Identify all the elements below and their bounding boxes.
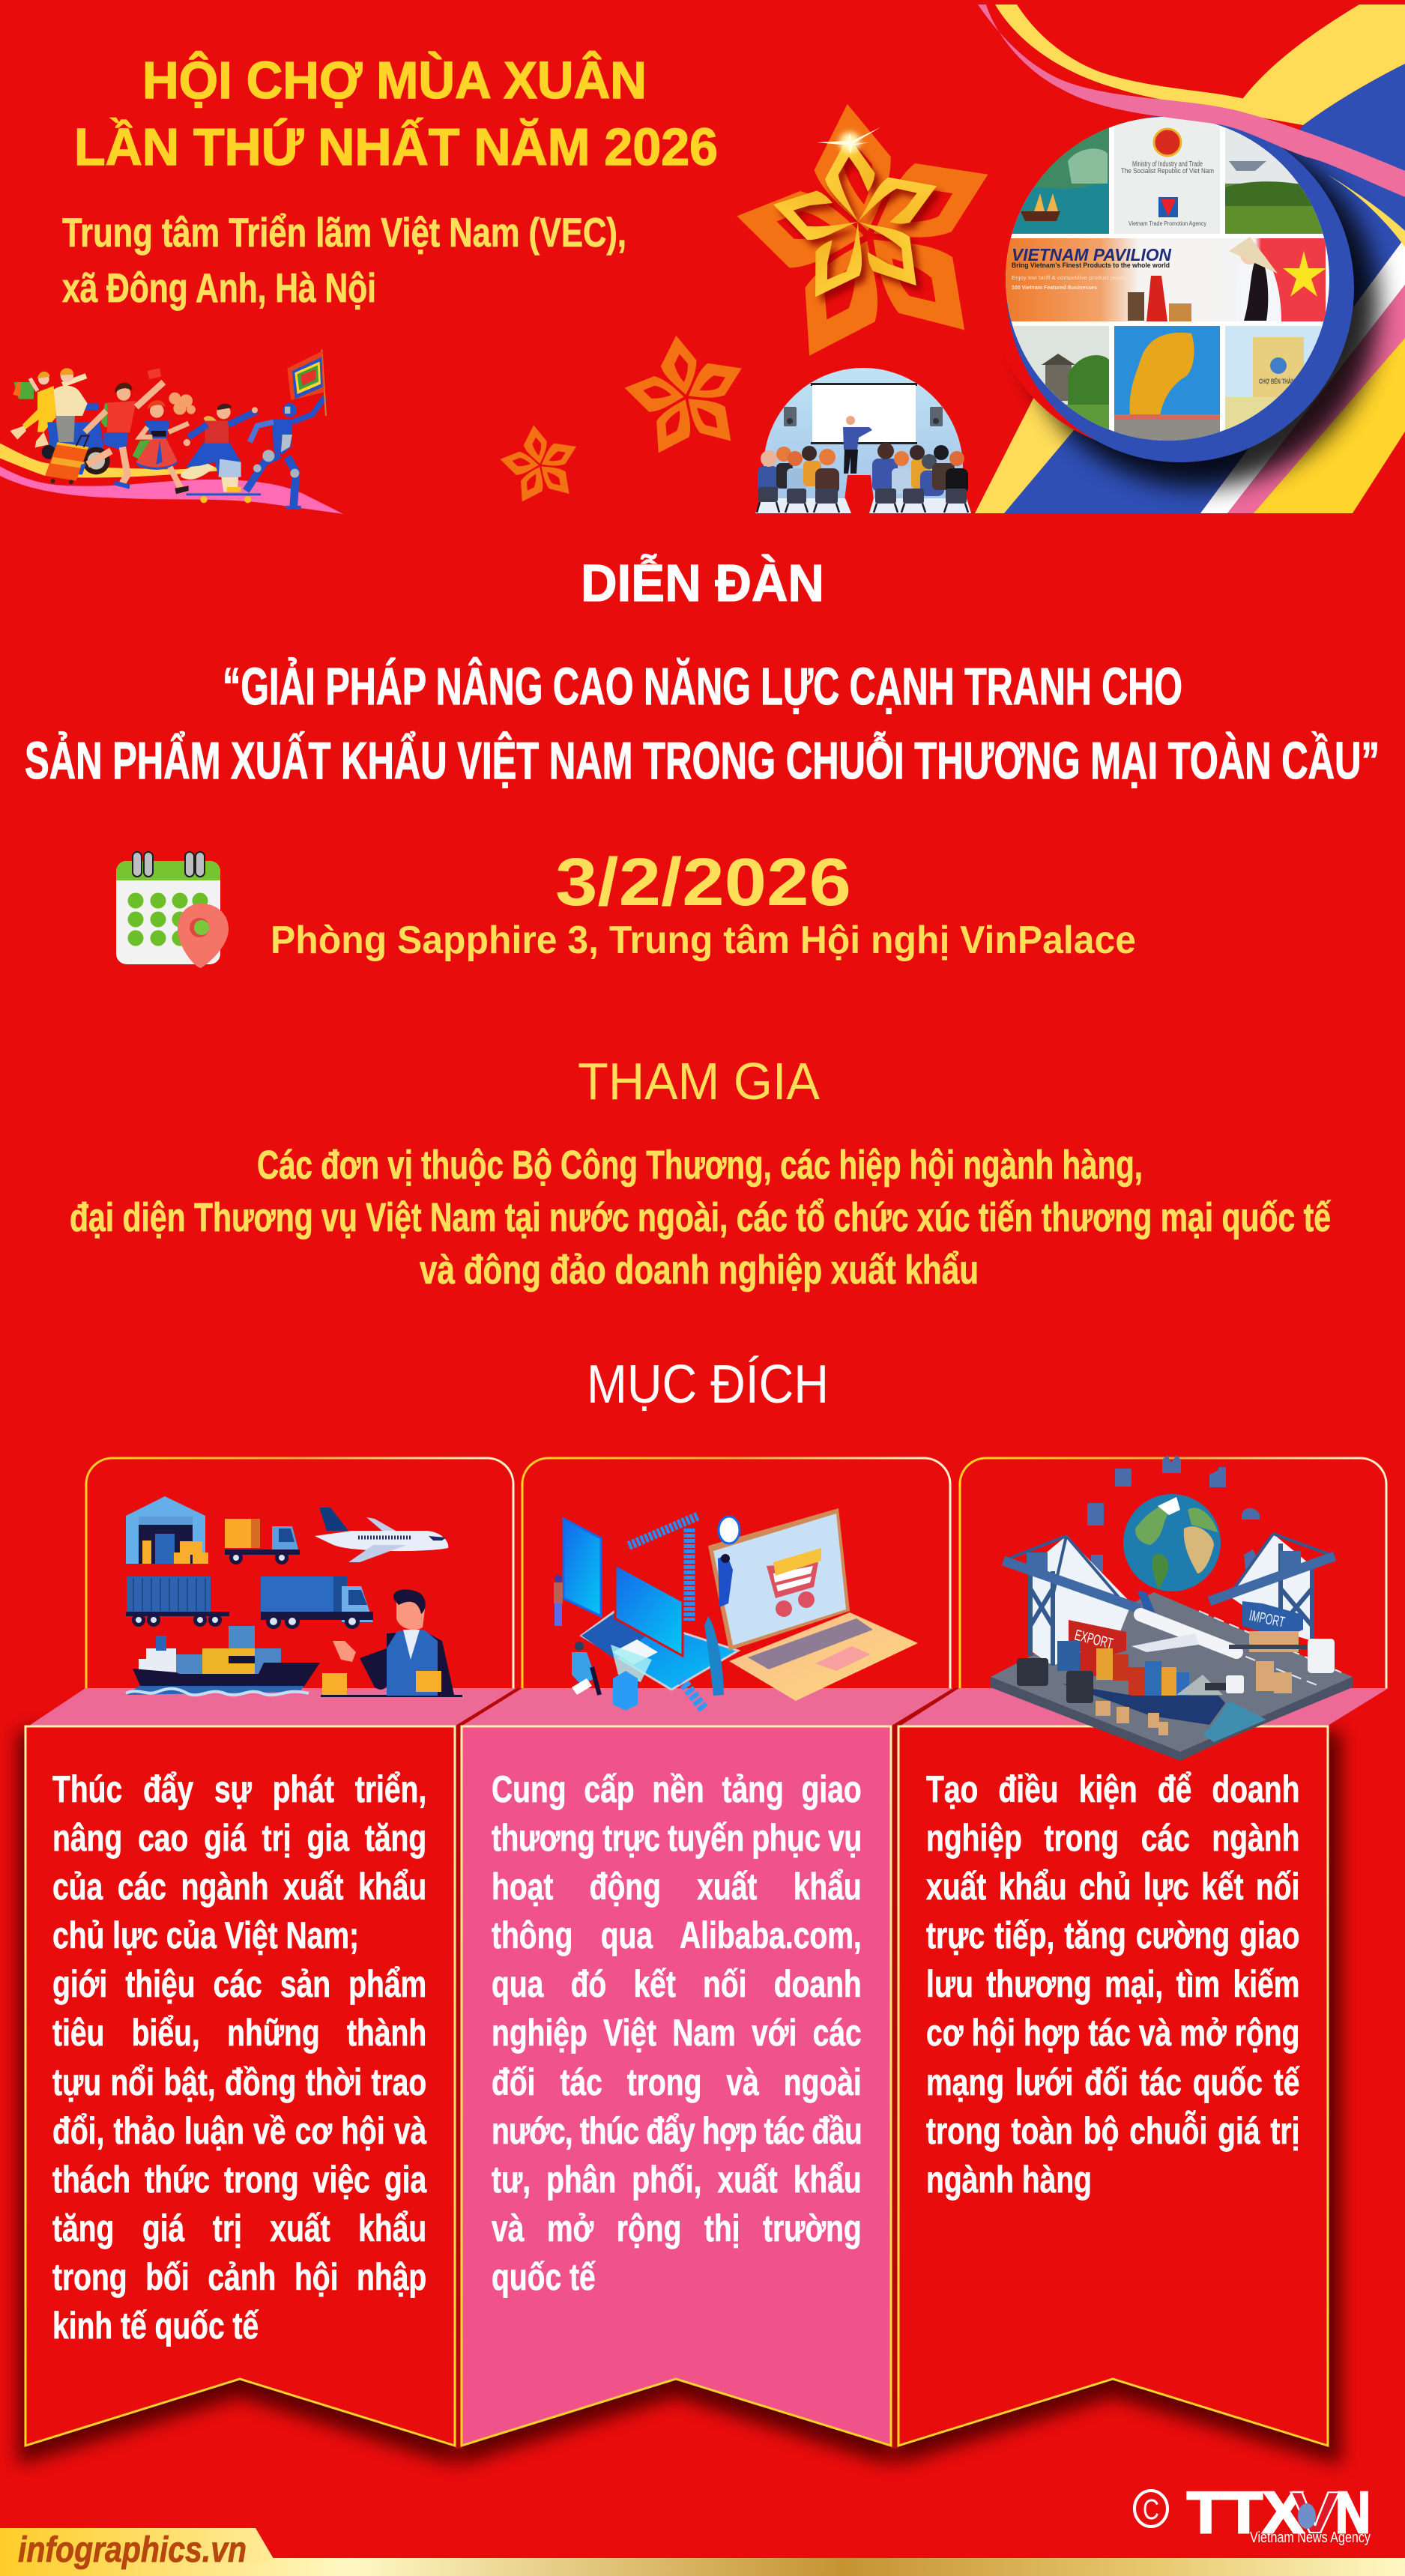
text: purpose 3: ngành hàng — [926, 2159, 1092, 2201]
person: man in red shirt — [79, 369, 163, 489]
text: purpose 1: đổi, thảo luận về cơ hội và — [52, 2110, 426, 2152]
heading: forum name — [25, 656, 1380, 790]
logo: TTXVN: Vietnam News Agency — [1250, 2530, 1371, 2546]
text: purpose 2: đối tác trong và ngoài — [492, 2061, 862, 2103]
icon: port platform — [991, 1592, 1353, 1761]
upper ribbons — [978, 4, 1405, 197]
photo: Vietnam Pavilion banner: 100 Vietnam Featured Businesses — [1012, 285, 1097, 291]
text: purpose 1: tựu nổi bật, đồng thời trao — [52, 2061, 426, 2103]
person: tall figures by laptop — [704, 1554, 733, 1696]
icon: phone — [563, 1519, 601, 1616]
icon: festival flag — [287, 350, 326, 416]
heading: participants: THAM GIA — [578, 1052, 820, 1110]
photo: Hanoi turtle tower — [1012, 326, 1109, 430]
text: purpose 2: và mở rộng thị trường — [492, 2207, 862, 2249]
icon: crane tower — [629, 1516, 698, 1621]
icon: globe — [1123, 1494, 1221, 1591]
logo: TTXVN: N — [1335, 2479, 1371, 2545]
icon: cargo boxes — [1096, 1631, 1299, 1735]
text: purpose 3: lưu thương mại, tìm kiếm — [926, 1963, 1299, 2005]
bottom bar — [0, 2558, 1405, 2576]
logo: TTXVN: V — [1290, 2479, 1340, 2545]
icon: container trailer — [126, 1576, 229, 1627]
photo: Ben Thanh market: CHỢ BẾN THÀNH — [1259, 378, 1298, 385]
text: purpose 3: Tạo điều kiện để doanh — [926, 1768, 1299, 1810]
text: purpose 1: tiêu biểu, những thành — [52, 2012, 426, 2054]
icon: calendar with location pin — [116, 852, 229, 968]
text: purpose 3: nghiệp trong các ngành — [926, 1817, 1299, 1859]
text: purpose 3: xuất khẩu chủ lực kết nối — [926, 1866, 1299, 1908]
illustration: global trade port — [991, 1455, 1353, 1761]
text: purpose 1: thách thức trong việc gia — [52, 2159, 426, 2201]
text: purpose 1: giới thiệu các sản phẩm — [52, 1963, 426, 2005]
text: purpose 3: mạng lưới đối tác quốc tế — [926, 2061, 1299, 2103]
banner 3 — [898, 1726, 1328, 2446]
icon: left crane — [1003, 1536, 1140, 1666]
text: purpose 1: chủ lực của Việt Nam; — [52, 1914, 359, 1956]
icon: tablet base — [581, 1611, 738, 1690]
icon: small truck — [225, 1519, 300, 1564]
header ribbons — [975, 4, 1405, 513]
heading: purpose: MỤC ĐÍCH — [587, 1355, 829, 1415]
illustration: festival crowd — [0, 350, 343, 514]
icon: airplane — [1131, 1591, 1236, 1652]
photo: ministry panel: Vietnam Trade Promotion Agency — [1128, 220, 1206, 227]
shadows under banners — [18, 1731, 1341, 2465]
icon: large apricot flower — [703, 73, 1036, 397]
photo collage circle — [1004, 112, 1334, 450]
text: purpose 2: thương trực tuyến phục vụ — [492, 1817, 862, 1859]
icon: import container: IMPORT — [1248, 1607, 1286, 1631]
text: purpose 1: nâng cao giá trị gia tăng — [52, 1817, 426, 1859]
person: seated reader — [572, 1642, 599, 1695]
text: purpose 2: quốc tế — [492, 2256, 596, 2298]
text: purpose 3: trực tiếp, tăng cường giao — [926, 1914, 1299, 1956]
photo: tea hills — [1225, 127, 1323, 234]
photo: Vietnam Pavilion banner: Bring Vietnam's Finest Products to the whole world — [1012, 261, 1170, 269]
logo: TTXVN: C — [1143, 2494, 1159, 2526]
text: purpose 1: của các ngành xuất khẩu — [52, 1866, 426, 1908]
illustration: logistics — [126, 1496, 462, 1697]
text: purpose 2: nghiệp Việt Nam với các — [492, 2012, 862, 2054]
person: logistics manager — [321, 1589, 462, 1697]
icon: forklifts — [1017, 1658, 1093, 1703]
photo: Vietnam Pavilion banner: VIETNAM PAVILION — [1012, 245, 1171, 264]
text: purpose 2 — [492, 1768, 862, 2298]
text: purpose 2: thông qua Alibaba.com, — [492, 1914, 862, 1956]
icon: shopping laptop — [708, 1508, 918, 1701]
logo: TTXVN: TTX — [1187, 2479, 1304, 2545]
icon: import container — [1242, 1601, 1303, 1639]
panel frames — [86, 1458, 1386, 1689]
icon: orange suitcase — [45, 436, 88, 484]
text: purpose 2: hoạt động xuất khẩu — [492, 1866, 862, 1908]
text: purpose 3: cơ hội hợp tác và mở rộng — [926, 2012, 1299, 2054]
date: 3/2/2026 — [555, 845, 851, 920]
text: purpose 2: nước, thúc đẩy hợp tác đầu — [492, 2110, 862, 2152]
platforms — [29, 1688, 1389, 2449]
participants text: và đông đảo doanh nghiệp xuất khẩu — [420, 1248, 979, 1292]
person: woman in yellow — [10, 372, 56, 447]
title: HỘI CHỢ MÙA XUÂN — [142, 50, 647, 109]
venue — [62, 209, 626, 311]
text: purpose 3 — [926, 1768, 1300, 2201]
title: LẦN THỨ NHẤT NĂM 2026 — [74, 118, 718, 176]
ribbon: yellow — [0, 444, 220, 477]
icon: warehouse — [126, 1496, 208, 1564]
illustration: presenter and audience — [755, 367, 971, 513]
icon: small apricot flower — [490, 416, 591, 514]
ribbon: pink — [0, 466, 343, 514]
banner 1 — [25, 1726, 455, 2446]
title — [74, 50, 718, 176]
participants text — [70, 1143, 1332, 1292]
icon: medium apricot flower — [608, 321, 764, 472]
person: robot — [246, 397, 324, 510]
venue: Trung tâm Triển lãm Việt Nam (VEC), — [62, 209, 626, 256]
text: purpose 2: Cung cấp nền tảng giao — [492, 1768, 862, 1810]
icon: export container: EXPORT — [1073, 1627, 1115, 1652]
heading: forum: DIỄN ĐÀN — [581, 553, 824, 612]
icon: cargo ship — [1057, 1641, 1225, 1725]
text: purpose 1: Thúc đẩy sự phát triển, — [52, 1768, 426, 1810]
photo: Vietnam Pavilion banner: Enjoy low tariff & competitive product prices! — [1012, 276, 1128, 281]
photo: ministry panel: The Socialist Republic of Viet Nam — [1121, 167, 1214, 175]
photo: Ben Thanh market — [1225, 326, 1323, 430]
banner 2 — [462, 1726, 891, 2446]
text: purpose 2: qua đó kết nối doanh — [492, 1963, 862, 2005]
website tab: infographics.vn — [18, 2530, 247, 2570]
icon: server pillar — [611, 1645, 652, 1711]
person: ao dai skater — [181, 404, 258, 492]
icon: blue coil — [680, 1678, 704, 1710]
photo: Vietnam Pavilion banner — [1004, 237, 1326, 321]
photo: ministry panel — [1114, 117, 1220, 234]
person: small figure by phone — [554, 1575, 563, 1626]
icon: airplane — [315, 1508, 448, 1562]
icon: floating screen — [615, 1564, 683, 1656]
photo: dragon bridge — [1114, 326, 1220, 441]
icon: industry symbols — [1087, 1455, 1260, 1572]
text: purpose 1: tăng giá trị xuất khẩu — [52, 2207, 426, 2249]
venue: xã Đông Anh, Hà Nội — [62, 264, 376, 311]
icon: skateboard — [186, 493, 261, 503]
logo: TTXVN — [1134, 2479, 1371, 2546]
photo: Ha Long bay — [1012, 127, 1109, 234]
icon: white trucks — [1205, 1639, 1335, 1693]
photo: ministry panel: Ministry of Industry and Trade — [1132, 160, 1203, 169]
icon: big truck — [261, 1576, 373, 1629]
text: purpose 1 — [52, 1768, 427, 2347]
icon: right crane — [1209, 1534, 1335, 1641]
text: purpose 2: tư, phân phối, xuất khẩu — [492, 2159, 862, 2201]
place: Phòng Sapphire 3, Trung tâm Hội nghị VinPalace — [271, 919, 1136, 962]
text: purpose 1: trong bối cảnh hội nhập — [52, 2256, 426, 2298]
icon: cargo ship — [126, 1626, 320, 1695]
text: purpose 3: trong toàn bộ chuỗi giá trị — [926, 2110, 1299, 2152]
person: girl in ethnic dress — [133, 393, 196, 494]
text: purpose 1: kinh tế quốc tế — [52, 2305, 259, 2347]
illustration: online trade platform — [554, 1508, 918, 1711]
person: scooter rider — [42, 368, 110, 474]
icon: export container — [1069, 1620, 1126, 1658]
